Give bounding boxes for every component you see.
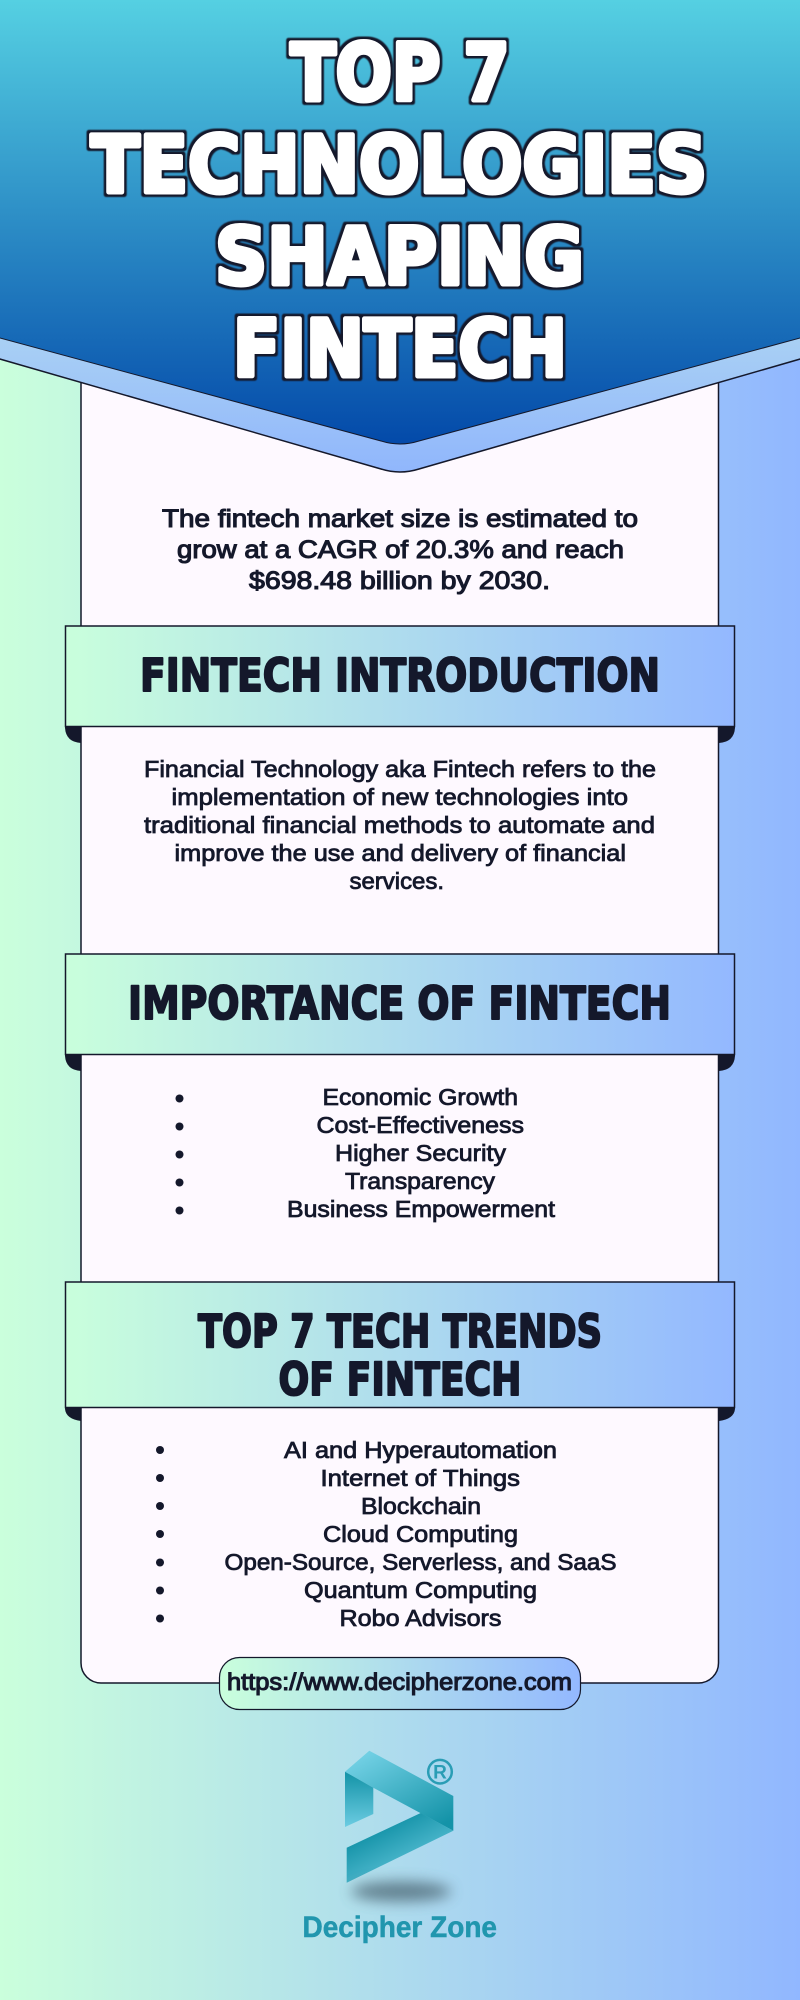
text: fintech definition: improve the use and delivery of financial (174, 840, 626, 866)
text: fintech definition (144, 756, 656, 894)
text: fintech definition: services. (350, 868, 444, 894)
list: tech trends: Cloud Computing (323, 1521, 518, 1547)
list: tech trends: Open-Source, Serverless, and SaaS (224, 1549, 616, 1575)
banner: top 7 tech trends: OF FINTECH (278, 1353, 522, 1406)
title: TOP 7 (290, 29, 510, 119)
banner: importance of fintech: IMPORTANCE OF FINTECH (128, 977, 671, 1030)
header: chevron banner (0, 0, 800, 444)
text: fintech definition: implementation of new technologies into (172, 784, 628, 810)
text: market size intro: $698.48 billion by 2030. (249, 567, 550, 595)
list: importance items (176, 1084, 556, 1222)
header: chevron band (0, 338, 800, 472)
list: tech trends: Quantum Computing (304, 1577, 537, 1603)
logo: decipher zone mark: R (433, 1762, 447, 1784)
list: tech trends: Internet of Things (320, 1465, 520, 1491)
text: fintech definition: traditional financial methods to automate and (144, 812, 655, 838)
title: FINTECH (233, 305, 567, 395)
panel: main content card (81, 300, 718, 1683)
url pill: https://www.decipherzone.com (227, 1669, 572, 1696)
list: tech trends: Blockchain (361, 1493, 481, 1519)
title (91, 29, 707, 395)
list: importance items: Business Empowerment (287, 1196, 556, 1222)
list: tech trends: AI and Hyperautomation (284, 1437, 557, 1463)
list: importance items: Transparency (345, 1168, 496, 1194)
text: market size intro (162, 505, 638, 595)
title: TECHNOLOGIES (91, 121, 707, 211)
text: fintech definition: Financial Technology aka Fintech refers to the (144, 756, 656, 782)
banner: top 7 tech trends: TOP 7 TECH TRENDS (198, 1305, 602, 1358)
list: tech trends: Robo Advisors (340, 1605, 502, 1631)
banner: fintech introduction (65, 626, 735, 743)
banner: fintech introduction: FINTECH INTRODUCTION (140, 649, 660, 702)
list: importance items: Economic Growth (322, 1084, 518, 1110)
title: SHAPING (215, 213, 584, 303)
list: importance items: Higher Security (335, 1140, 507, 1166)
list: tech trends (156, 1437, 616, 1631)
logo: decipher zone mark (345, 1751, 453, 1902)
list: importance items: Cost-Effectiveness (316, 1112, 524, 1138)
url pill (220, 1658, 580, 1710)
banner: top 7 tech trends (65, 1282, 735, 1421)
text: market size intro: grow at a CAGR of 20.3% and reach (177, 536, 624, 564)
text: market size intro: The fintech market size is estimated to (162, 505, 638, 533)
logo: wordmark: Decipher Zone (302, 1911, 497, 1944)
banner: importance of fintech (65, 954, 735, 1071)
